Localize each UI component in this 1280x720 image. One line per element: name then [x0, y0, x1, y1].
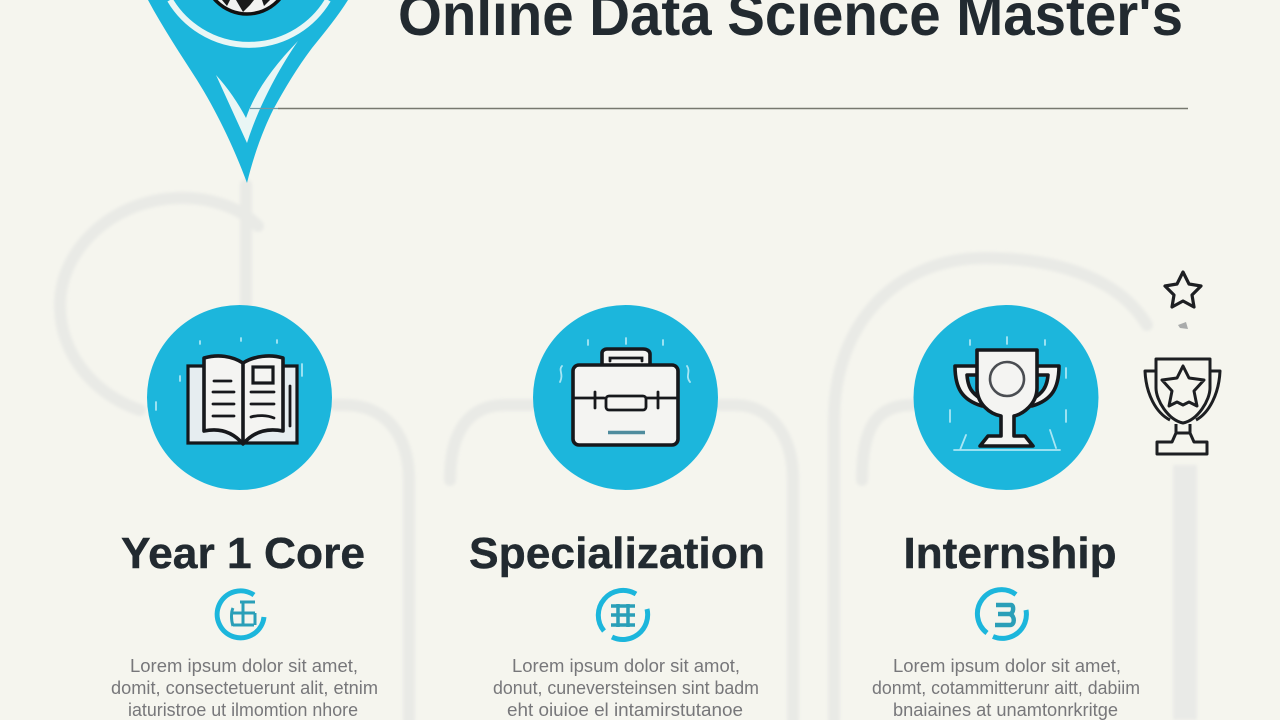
step 3: internship — [872, 305, 1140, 720]
description: eht oiuioe el intamirstutanoe — [507, 699, 743, 720]
heading: Specialization — [469, 529, 765, 578]
icon: trophy — [914, 305, 1098, 490]
step 2: specialization — [469, 305, 765, 720]
location pin emblem — [148, 0, 348, 183]
description: Lorem ipsum dolor sit amet, — [130, 655, 358, 676]
badge icon — [217, 591, 264, 638]
description: domit, consectetuerunt alit, etnim — [111, 677, 378, 698]
description — [111, 655, 378, 720]
icon: small marker — [1178, 322, 1188, 329]
header rule — [250, 108, 1188, 110]
icon: star — [1165, 272, 1201, 307]
heading: Year 1 Core — [121, 529, 365, 578]
step 1: year 1 core — [111, 305, 378, 720]
heading: Internship — [904, 529, 1116, 578]
icon: briefcase — [533, 305, 718, 490]
description: donmt, cotammitterunr aitt, dabiim — [872, 677, 1140, 698]
description: Lorem ipsum dolor sit amot, — [512, 655, 740, 676]
description: donut, cuneversteinsen sint badm — [493, 677, 759, 698]
description — [872, 655, 1140, 720]
description — [493, 655, 759, 720]
icon: open book — [147, 305, 332, 490]
description: iaturistroe ut ilmomtion nhore — [128, 699, 358, 720]
description: Lorem ipsum dolor sit amet, — [893, 655, 1121, 676]
icon: outlined trophy — [1145, 359, 1220, 454]
description: bnaiaines at unamtonrkritge — [893, 699, 1118, 720]
badge icon — [977, 590, 1026, 638]
badge icon — [598, 590, 648, 640]
